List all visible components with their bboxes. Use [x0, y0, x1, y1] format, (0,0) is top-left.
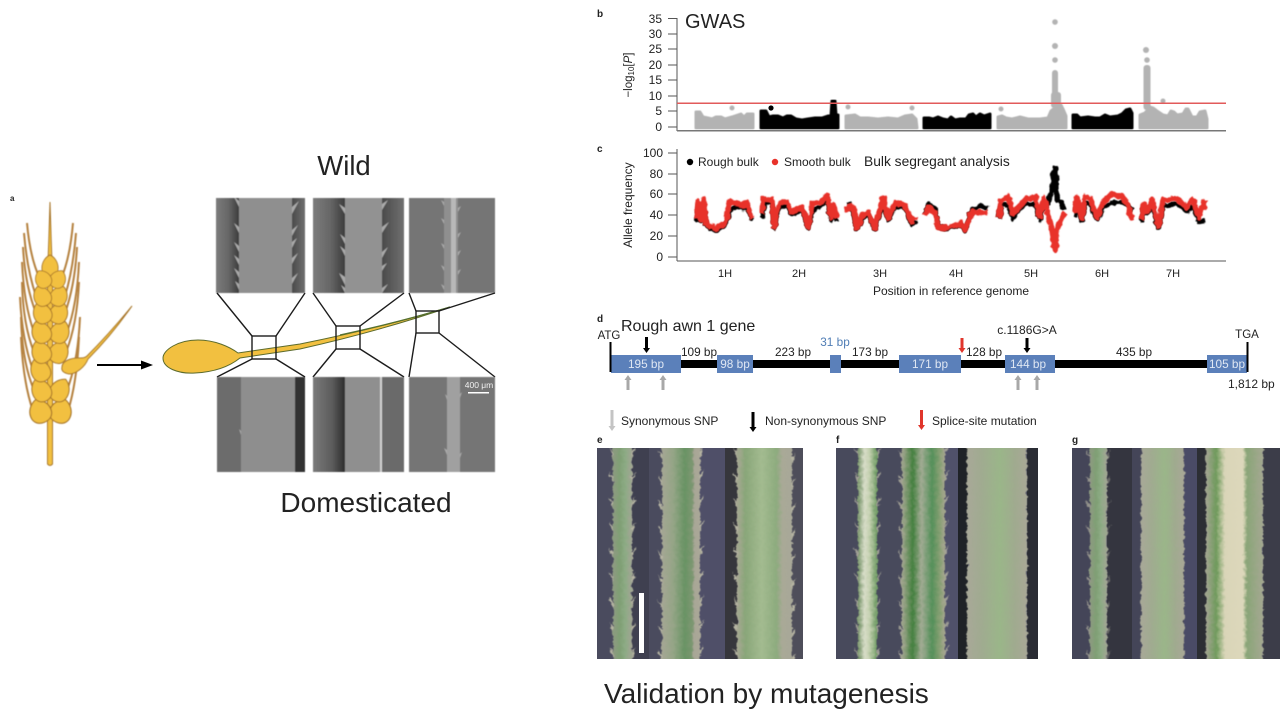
wheat awns	[20, 223, 80, 411]
Manhattan gray chromosomes	[696, 105, 1207, 128]
panel g: awn photographs	[1072, 448, 1280, 659]
legend: Rough bulk	[698, 155, 760, 169]
y axis	[668, 149, 677, 261]
y axis tick labels: 100	[643, 146, 663, 160]
y axis title: P]	[623, 52, 635, 63]
wheat stem and top awn	[48, 202, 52, 466]
y axis tick labels: 15	[649, 73, 662, 87]
isolated grain with awn	[163, 307, 450, 373]
wheat grains	[25, 255, 76, 426]
intron size labels	[681, 345, 1152, 359]
exon size labels: 195 bp	[628, 357, 664, 371]
y axis tick labels	[643, 146, 663, 264]
scale bar	[639, 593, 644, 653]
red splice arrow	[958, 338, 966, 353]
panel c label: c	[597, 144, 603, 155]
legend: non-synonymous SNP: Non-synonymous SNP	[765, 414, 886, 428]
intron size labels: 109 bp	[681, 345, 717, 359]
intron size labels: 128 bp	[966, 345, 1002, 359]
black outlier	[768, 105, 774, 111]
x axis chromosome labels: 1H	[718, 268, 732, 280]
panel e label: e	[597, 435, 603, 446]
smooth bulk line	[697, 195, 1205, 250]
y axis title: [	[623, 63, 635, 67]
y axis	[668, 18, 677, 131]
baseline axis	[677, 130, 1226, 132]
arrow: spike to grain	[97, 360, 153, 370]
intron size labels: 435 bp	[1116, 345, 1152, 359]
y axis tick labels: 0	[656, 250, 663, 264]
y axis tick labels: 35	[649, 12, 662, 26]
exon size labels: 144 bp	[1010, 357, 1046, 371]
y axis tick labels: 0	[655, 120, 662, 134]
x axis	[677, 260, 1226, 262]
heading: Domesticated: Domesticated	[280, 487, 452, 518]
zoom box 1	[252, 336, 276, 359]
SEM wild 3	[408, 197, 496, 294]
exon size labels: 171 bp	[912, 357, 948, 371]
panel b: GWAS Manhattan plot	[623, 11, 1226, 134]
y axis tick labels: 25	[649, 42, 662, 56]
panel f label: f	[836, 435, 840, 446]
x axis chromosome labels: 4H	[949, 268, 963, 280]
exon size labels: 105 bp	[1209, 357, 1245, 371]
zoom box 2	[336, 326, 360, 349]
y axis title: Allele frequency	[621, 162, 635, 248]
legend: synonymous SNP: Synonymous SNP	[621, 414, 718, 428]
intron size labels: 173 bp	[852, 345, 888, 359]
x axis chromosome labels: 5H	[1024, 268, 1038, 280]
legend: Smooth bulk	[784, 155, 852, 169]
y axis tick labels: 30	[649, 27, 662, 41]
x axis chromosome labels: 6H	[1095, 268, 1109, 280]
x axis chromosome labels: 7H	[1166, 268, 1180, 280]
y axis title: −log	[623, 75, 635, 98]
exons	[611, 355, 1247, 373]
x axis title: Position in reference genome	[873, 284, 1029, 298]
scale bar: 400 µm: 400 μm	[465, 380, 493, 390]
y axis tick labels: 20	[649, 58, 662, 72]
legend: non-synonymous SNP	[750, 412, 886, 432]
y axis tick labels: 5	[655, 104, 662, 118]
panel a: wheat spike illustration	[20, 202, 132, 466]
detached spikelet	[62, 306, 132, 374]
awn green midrib	[340, 307, 450, 335]
exon size labels	[628, 357, 1245, 371]
stop codon: TGA	[1235, 329, 1259, 341]
start and stop bars	[610, 342, 1248, 372]
legend: synonymous SNP	[608, 410, 718, 431]
start codon: ATG	[598, 330, 620, 342]
GWAS title: GWAS	[685, 11, 745, 33]
SEM panels: wild awns	[216, 197, 495, 293]
intron size labels: 223 bp	[775, 345, 811, 359]
panel a label: a	[10, 194, 15, 203]
black SNP arrows	[643, 337, 1030, 353]
panel b label: b	[597, 9, 603, 20]
legend: splice-site mutation: Splice-site mutation	[932, 414, 1037, 428]
panel c: bulk segregant analysis chart	[621, 146, 1226, 298]
y axis tick labels: 60	[650, 187, 663, 201]
SEM panels: domesticated awns	[217, 377, 495, 472]
panel e: awn photographs	[597, 448, 803, 659]
y axis title: 10	[627, 66, 636, 75]
legend	[687, 155, 852, 169]
Manhattan black chromosomes	[761, 101, 1132, 128]
y axis tick labels: 10	[649, 89, 662, 103]
zoom box 3	[416, 311, 439, 333]
connector lines	[217, 293, 495, 377]
x axis chromosome labels: 2H	[792, 268, 806, 280]
significance threshold line	[677, 102, 1226, 104]
x axis chromosome labels: 3H	[873, 268, 887, 280]
chart annotation: Bulk segregant analysis	[864, 154, 1010, 169]
rough bulk line	[697, 168, 1205, 231]
gene title: Rough awn 1 gene	[621, 318, 755, 335]
x axis chromosome labels	[718, 268, 1180, 280]
heading: Validation by mutagenesis: Validation by mutagenesis	[604, 678, 929, 709]
gray SNP arrows	[624, 375, 1040, 390]
SEM wild 1	[215, 197, 306, 294]
SEM domesticated 2	[312, 376, 405, 473]
SEM domesticated 1	[216, 376, 306, 473]
Manhattan peaks and gray outliers	[730, 19, 1166, 112]
mutation name: c.1186G>A	[997, 323, 1057, 337]
31 bp label: 31 bp	[820, 335, 850, 349]
y axis tick labels: 40	[650, 208, 663, 222]
heading: Wild: Wild	[317, 150, 371, 181]
intron backbone	[611, 360, 1247, 368]
SEM wild 2	[312, 197, 405, 294]
y axis tick labels: 80	[650, 167, 663, 181]
panel g label: g	[1072, 435, 1078, 446]
panel d label: d	[597, 314, 603, 325]
SEM domesticated 3	[408, 376, 496, 473]
legend: splice-site mutation	[918, 410, 1037, 430]
y axis tick labels: 20	[650, 229, 663, 243]
y axis tick labels	[649, 12, 662, 134]
panel a: dissected grain and awn	[163, 307, 450, 373]
exon size labels: 98 bp	[720, 357, 750, 371]
zoom boxes and connector lines	[217, 293, 495, 377]
panel f: awn photographs	[836, 448, 1038, 659]
panel d: gene structure	[598, 318, 1275, 432]
total length: 1,812 bp	[1228, 377, 1275, 391]
